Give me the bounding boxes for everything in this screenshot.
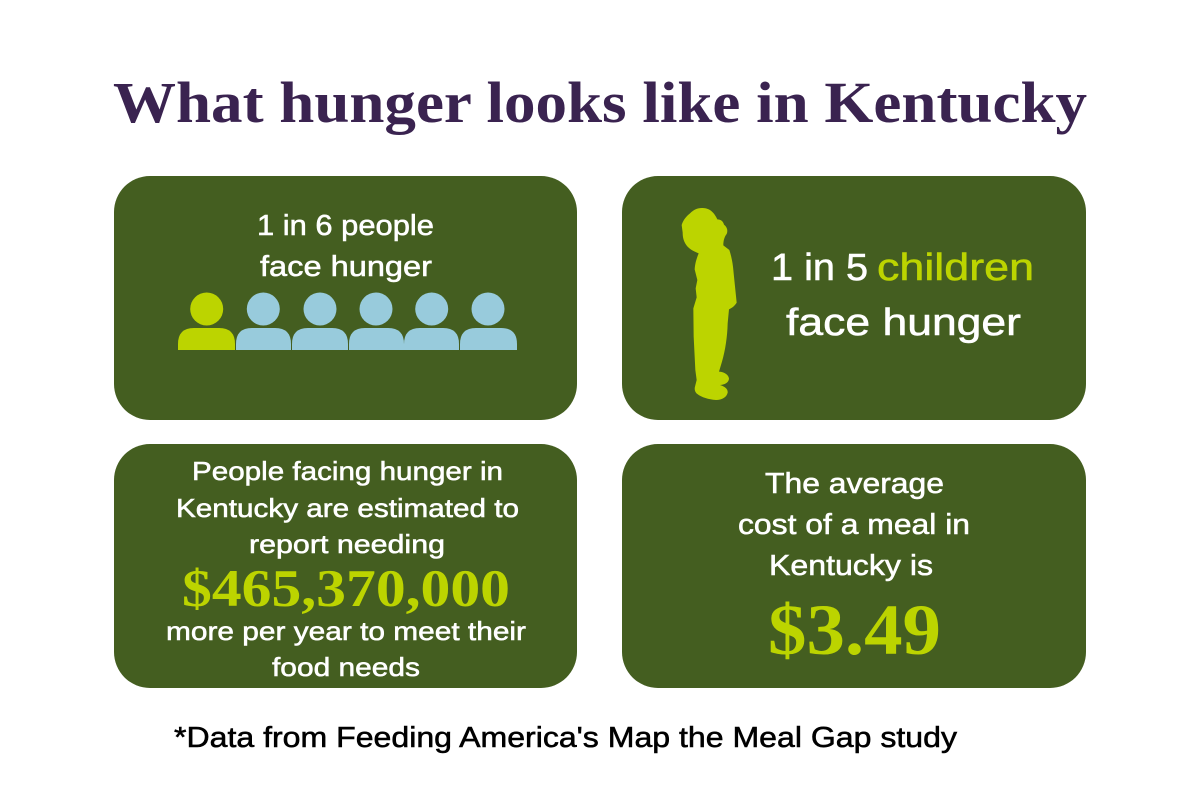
text: 1 in 5 children face hunger: 1 in 5 (771, 247, 868, 289)
figure: $465,370,000: $465,370,000 (182, 560, 510, 618)
icon: row of six people (178, 292, 517, 350)
text: average cost of a meal (738, 468, 970, 582)
panel: 1 in 5 children (622, 176, 1086, 420)
panel: money needed per year (114, 444, 577, 688)
text: 1 in 6 people face hunger: 1 in 6 people (257, 210, 434, 242)
icon: child silhouette looking up (682, 208, 737, 400)
text: average cost of a meal: The average (765, 468, 944, 500)
figure: $3.49: $3.49 (768, 590, 941, 670)
text: people facing hunger intro: Kentucky are estimated to (176, 493, 519, 523)
text: people facing hunger intro (176, 456, 519, 559)
text: more per year (166, 616, 526, 682)
text: 1 in 6 people face hunger (257, 210, 434, 283)
text: average cost of a meal: Kentucky is (769, 550, 933, 582)
text: average cost of a meal: cost of a meal in (738, 509, 970, 541)
text: 1 in 5 children face hunger (771, 247, 1034, 344)
text: more per year: more per year to meet their (166, 616, 526, 646)
text: more per year: food needs (272, 652, 420, 682)
text: people facing hunger intro: People facing hunger in (192, 456, 503, 486)
text: 1 in 6 people face hunger: face hunger (260, 251, 432, 283)
panel: average meal cost (622, 444, 1086, 688)
text: people facing hunger intro: report needing (249, 529, 445, 559)
text: 1 in 5 children face hunger: face hunger (786, 302, 1021, 344)
title: What hunger looks like in Kentucky (113, 70, 1087, 135)
panel: 1 in 6 people (114, 176, 577, 420)
footnote: data source: *Data from Feeding America's Map the Meal Gap study (174, 722, 958, 754)
text: 1 in 5 children face hunger: children (877, 247, 1034, 289)
